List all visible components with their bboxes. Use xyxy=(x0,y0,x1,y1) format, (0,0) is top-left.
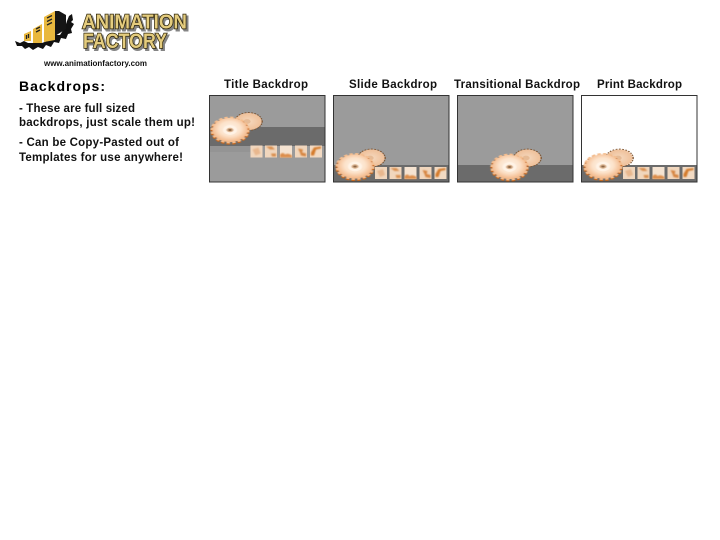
logo wordmark: ANIMATION xyxy=(82,12,187,34)
thumbnail strip xyxy=(375,167,446,179)
bullet one: backdrops, just scale them up! xyxy=(19,117,195,129)
heading: Backdrops: xyxy=(19,78,105,94)
gears xyxy=(212,113,262,144)
logo wordmark shadow: FACTORY xyxy=(85,32,169,55)
column heading: Print Backdrop: Print Backdrop xyxy=(597,79,682,91)
logo wordmark shadow: ANIMATION xyxy=(84,14,189,36)
logo: Animation Factory xyxy=(15,11,189,68)
bullet one: - These are full sized xyxy=(19,103,135,115)
bullet one xyxy=(19,103,195,129)
panel: transitional backdrop xyxy=(458,96,573,182)
column heading: Slide Backdrop: Slide Backdrop xyxy=(349,79,437,91)
gears xyxy=(492,149,541,181)
logo wordmark xyxy=(82,12,187,53)
logo wordmark: FACTORY xyxy=(83,30,167,53)
panel: title backdrop xyxy=(210,96,325,182)
text block: backdrops description xyxy=(19,78,195,164)
bullet two: Templates for use anywhere! xyxy=(19,152,183,164)
icon: factory on a black gear xyxy=(15,11,74,50)
bullet two xyxy=(19,137,183,164)
logo url: www.animationfactory.com xyxy=(43,58,147,68)
gears xyxy=(585,149,633,180)
gears xyxy=(337,149,385,180)
logo wordmark shadow xyxy=(84,14,189,55)
column heading: Transitional Backdrop: Transitional Backdrop xyxy=(454,79,580,91)
panel: print backdrop xyxy=(582,96,697,182)
panel: slide backdrop xyxy=(334,96,449,182)
thumbnail strip xyxy=(623,167,694,179)
bullet two: - Can be Copy-Pasted out of xyxy=(19,137,179,149)
thumbnail strip xyxy=(250,146,322,158)
column heading: Title Backdrop: Title Backdrop xyxy=(224,79,308,91)
